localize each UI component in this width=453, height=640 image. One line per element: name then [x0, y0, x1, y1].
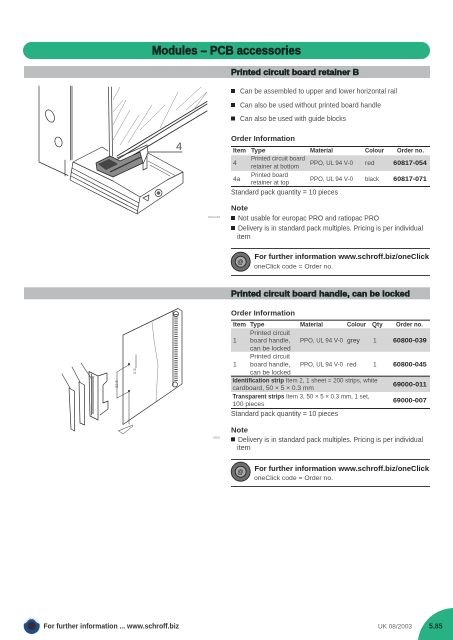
order table 2: Printed circuit — [250, 330, 290, 337]
callout number 4: 4 — [176, 141, 182, 153]
oneClick callout 1 — [231, 248, 430, 276]
order table 1: 4a — [233, 176, 241, 183]
pack quantity note 2: Standard pack quantity = 10 pieces — [231, 409, 338, 418]
section heading band: handle: Printed circuit board handle, can be locked — [231, 288, 410, 298]
oneClick callout 2 — [231, 459, 430, 487]
order table 1 — [231, 146, 430, 187]
order table 2: cardboard, 50 × 5 × 0.3 mm — [232, 385, 314, 392]
order table 2: 1 — [373, 362, 377, 368]
order table 2: can be locked — [250, 370, 291, 376]
order table 1: Printed circuit board — [251, 156, 305, 162]
icon: oneClick globe — [231, 252, 250, 271]
note block 2 — [231, 425, 423, 452]
feature bullet list: Can also be used without printed board handle — [240, 101, 381, 109]
section heading band: retainer B — [24, 66, 430, 78]
oneClick callout 1: oneClick code = Order no. — [254, 263, 333, 270]
order table 2: 60800-045 — [393, 362, 427, 368]
technical drawing: board handle: 2.5 — [132, 368, 137, 374]
order table 1: 60817-054 — [393, 160, 427, 167]
footer: UK 08/2003 — [378, 623, 412, 630]
note block 2: Delivery is in standard pack multiples. Pricing is per individual — [238, 435, 423, 444]
feature bullet list — [231, 88, 397, 123]
order table 2: Order no. — [396, 322, 423, 328]
order table 2: grey — [347, 338, 361, 344]
note block 1: Not usable for europac PRO and ratiopac PRO — [238, 214, 379, 222]
icon: oneClick globe — [231, 462, 250, 481]
rail — [70, 147, 183, 214]
order table 2: Printed circuit — [250, 354, 290, 360]
part: handle — [89, 372, 108, 420]
technical drawing: board handle — [62, 308, 182, 434]
order table 2 — [231, 320, 430, 409]
order table 2: Material — [300, 322, 323, 328]
part: strips — [69, 382, 84, 431]
order table 2: PPO, UL 94 V-0 — [300, 338, 343, 344]
order table 2: 100 pieces — [232, 401, 265, 408]
note block 1: Delivery is in standard pack multiples. Pricing is per individual — [238, 224, 423, 232]
retainer — [96, 152, 143, 177]
order table 2: 69000-007 — [393, 398, 427, 404]
note block 1 — [231, 204, 423, 241]
order table 2: 1 — [233, 338, 237, 344]
page number tab — [418, 608, 453, 640]
order table 2: red — [347, 362, 357, 368]
oneClick callout 2: oneClick code = Order no. — [254, 475, 333, 482]
order table 1: Printed board — [251, 172, 288, 179]
icon: Schroff logo — [24, 618, 40, 634]
order table 1: Order no. — [397, 148, 424, 154]
order table 1: Material — [310, 148, 333, 154]
note block 1: Note — [231, 204, 248, 212]
footer — [24, 608, 453, 640]
order table 2: Transparent strips Item 3, 50 × 5 × 0.3 mm, 1 set, — [232, 393, 370, 400]
order table 2: PPO, UL 94 V-0 — [300, 362, 343, 368]
order table 2: board handle, — [250, 338, 290, 344]
order table 1: red — [365, 160, 375, 167]
order information heading 2: Order Information — [231, 308, 295, 317]
section heading band: handle — [24, 287, 430, 299]
order table 2: can be locked — [250, 346, 291, 352]
order table 1: PPO, UL 94 V-0 — [310, 160, 353, 167]
order table 1: Type — [251, 148, 266, 154]
page title: Modules – PCB accessories — [152, 46, 301, 58]
section heading band: retainer B: Printed circuit board retainer B — [231, 67, 359, 77]
feature bullet list: Can also be used with guide blocks — [240, 115, 346, 123]
order table 2: 60800-039 — [393, 338, 427, 344]
order table 2: 69000-011 — [393, 382, 427, 388]
page number tab: 5.85 — [429, 624, 443, 630]
order table 1: retainer at bottom — [251, 164, 299, 170]
footer: For further information ... www.schroff.biz — [44, 624, 179, 630]
note block 1: item — [237, 232, 251, 241]
order table 2: 1 — [233, 362, 237, 368]
icon: oneClick globe: @ — [238, 260, 244, 266]
icon: oneClick globe: @ — [238, 470, 244, 476]
order table 2: Qty — [372, 322, 383, 328]
feature bullet list: Can be assembled to upper and lower horizontal rail — [240, 88, 397, 96]
oneClick callout 2: For further information www.schroff.biz/oneClick — [254, 464, 430, 473]
order table 1: 4 — [233, 160, 237, 167]
note block 2: item — [237, 443, 251, 452]
order information heading 1: Order Information — [231, 134, 295, 143]
order table 2: 1 — [373, 338, 377, 344]
order table 1: PPO, UL 94 V-0 — [310, 176, 353, 183]
order table 2: Type — [250, 322, 265, 328]
order table 2: Identification strip Item 2, 1 sheet = 200 strips, white — [232, 378, 378, 384]
order table 2: Colour — [347, 322, 366, 328]
order table 2: board handle, — [250, 362, 290, 368]
note block 2: Note — [231, 425, 248, 434]
dimension labels: 22.5 — [114, 379, 119, 388]
header bar — [23, 42, 430, 59]
oneClick callout 1: For further information www.schroff.biz/oneClick — [254, 252, 430, 261]
order table 1: 60817-071 — [393, 176, 427, 183]
drawing reference code 2: A5/01 — [213, 436, 220, 440]
order table 1: black — [365, 176, 380, 183]
order table 1: retainer at top — [251, 180, 289, 186]
order table 1: Colour — [365, 148, 384, 154]
technical drawing: retainer on rail — [39, 86, 207, 214]
order table 2: Item — [233, 322, 246, 328]
pack quantity note 1: Standard pack quantity = 10 pieces — [231, 188, 338, 196]
order table 1: Item — [233, 148, 246, 154]
drawing reference code: KDat448 — [208, 215, 220, 219]
